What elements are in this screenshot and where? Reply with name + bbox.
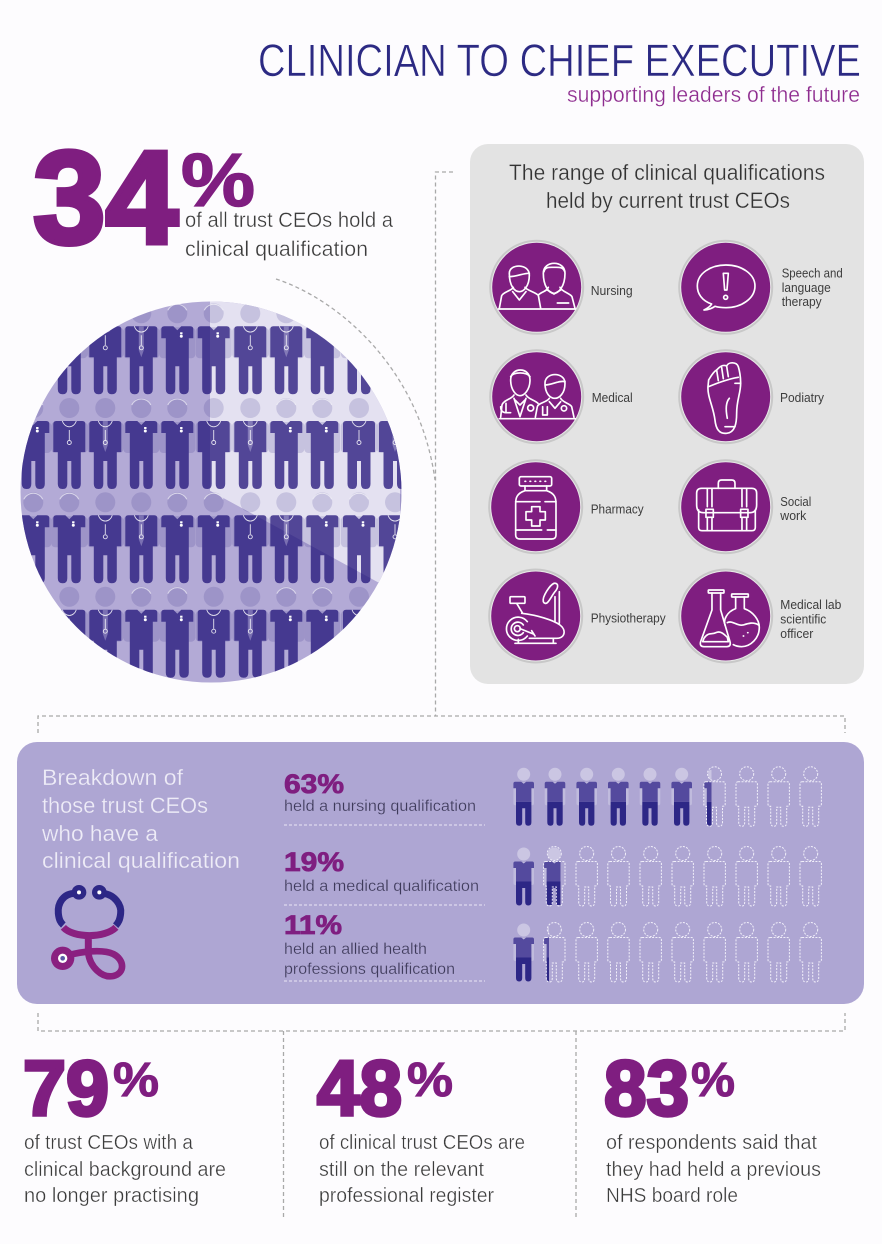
- icon: medical lab flasks: officer: [780, 626, 814, 641]
- statistic: medical 19%: held a medical qualification: [284, 878, 479, 895]
- panel heading: The range of clinical qualifications: [509, 160, 825, 185]
- icon: medical: [490, 350, 633, 443]
- statistic: nursing 63%: 63%: [284, 769, 344, 799]
- icon: nursing: [490, 241, 633, 334]
- headline statistic: 34%: %: [181, 138, 255, 222]
- statistic: 83% previous NHS board role: [604, 1044, 821, 1207]
- icon: nursing: Nursing: [591, 283, 633, 298]
- headline statistic: 34%: clinical qualification: [185, 238, 368, 261]
- breakdown heading: clinical qualification: [42, 848, 240, 873]
- statistic: medical 19%: 19%: [284, 847, 344, 877]
- dashed connector: bracket above breakdown panel: [38, 716, 845, 733]
- icon: physiotherapy exercise bike: [489, 570, 666, 662]
- pictogram: allied health 11 percent: [513, 922, 821, 982]
- statistic: 79% no longer practising: [23, 1044, 226, 1207]
- statistic: 48% still on register: professional register: [319, 1185, 494, 1207]
- breakdown heading: those trust CEOs: [42, 793, 208, 818]
- icon: stethoscope: [51, 885, 122, 976]
- pictogram: nursing 63 percent: [513, 767, 821, 826]
- statistic: 48% still on register: [317, 1044, 525, 1207]
- icon: speech and language therapy: therapy: [782, 294, 822, 309]
- statistic: 48% still on register: of clinical trust CEOs are: [319, 1132, 525, 1154]
- statistic: nursing 63%: [284, 769, 476, 815]
- headline statistic: 34%: 34: [33, 124, 178, 271]
- breakdown heading: [41, 765, 240, 873]
- icon: speech and language therapy: [679, 241, 843, 334]
- dashed connector: spine to qualifications panel: [436, 172, 453, 716]
- icon: social work briefcase: Social: [780, 494, 811, 509]
- headline statistic: 34%: [33, 124, 393, 271]
- statistic: medical 19%: [284, 847, 479, 895]
- statistic: 79% no longer practising: no longer practising: [24, 1185, 199, 1207]
- statistic: 79% no longer practising: clinical background are: [24, 1159, 226, 1181]
- breakdown heading: who have a: [41, 821, 159, 846]
- statistic: 48% still on register: %: [407, 1054, 453, 1107]
- panel heading: held by current trust CEOs: [546, 188, 790, 213]
- statistic: allied health 11%: [284, 910, 455, 978]
- statistic: 83% previous NHS board role: of respondents said that: [606, 1132, 817, 1154]
- icon: physiotherapy exercise bike: Physiotherapy: [591, 610, 666, 626]
- breakdown heading: Breakdown of: [42, 765, 184, 790]
- icon: medical lab flasks: [679, 570, 841, 662]
- statistic: 48% still on register: still on the relevant: [319, 1159, 484, 1181]
- icon: social work briefcase: work: [779, 508, 807, 523]
- statistic: 83% previous NHS board role: 83: [604, 1044, 689, 1132]
- statistic: 48% still on register: 48: [317, 1044, 402, 1132]
- dashed connector: bracket below breakdown panel: [38, 1013, 845, 1031]
- statistic: allied health 11%: professions qualification: [284, 961, 455, 978]
- icon: podiatry: [679, 350, 824, 443]
- icon: podiatry: Podiatry: [780, 390, 824, 405]
- dashed connector: arc from pie to spine: [276, 279, 435, 480]
- subtitle: supporting leaders of the future: [567, 82, 860, 107]
- statistic: allied health 11%: held an allied health: [284, 941, 427, 958]
- pie chart: 34% of trust CEOs, filled with staff figures: [15, 295, 413, 690]
- statistic: 83% previous NHS board role: they had held a previous: [606, 1159, 821, 1181]
- statistic: 79% no longer practising: of trust CEOs with a: [24, 1132, 194, 1154]
- panel: range of clinical qualifications: [470, 144, 864, 684]
- pictogram: medical 19 percent: [513, 846, 821, 906]
- panel: breakdown of clinical qualifications: [17, 742, 864, 1004]
- dashed divider: between bottom statistics: [284, 1031, 576, 1220]
- icon: pharmacy: [489, 460, 644, 553]
- icon: pharmacy: Pharmacy: [591, 502, 644, 516]
- statistic: nursing 63%: held a nursing qualification: [284, 798, 476, 815]
- statistic: 79% no longer practising: 79: [23, 1044, 109, 1132]
- icon: speech and language therapy: language: [782, 280, 831, 295]
- icon: medical: Medical: [592, 390, 633, 405]
- icon: medical lab flasks: scientific: [780, 612, 827, 626]
- icon: speech and language therapy: Speech and: [782, 266, 843, 280]
- statistic: 79% no longer practising: %: [113, 1054, 159, 1107]
- statistic: 83% previous NHS board role: %: [691, 1054, 735, 1107]
- statistic: allied health 11%: 11%: [284, 910, 342, 940]
- headline statistic: 34%: of all trust CEOs hold a: [185, 209, 393, 232]
- statistic: 83% previous NHS board role: NHS board role: [606, 1185, 738, 1207]
- icon: social work briefcase: [679, 460, 811, 553]
- icon: medical lab flasks: Medical lab: [780, 597, 841, 612]
- panel heading: [509, 160, 825, 213]
